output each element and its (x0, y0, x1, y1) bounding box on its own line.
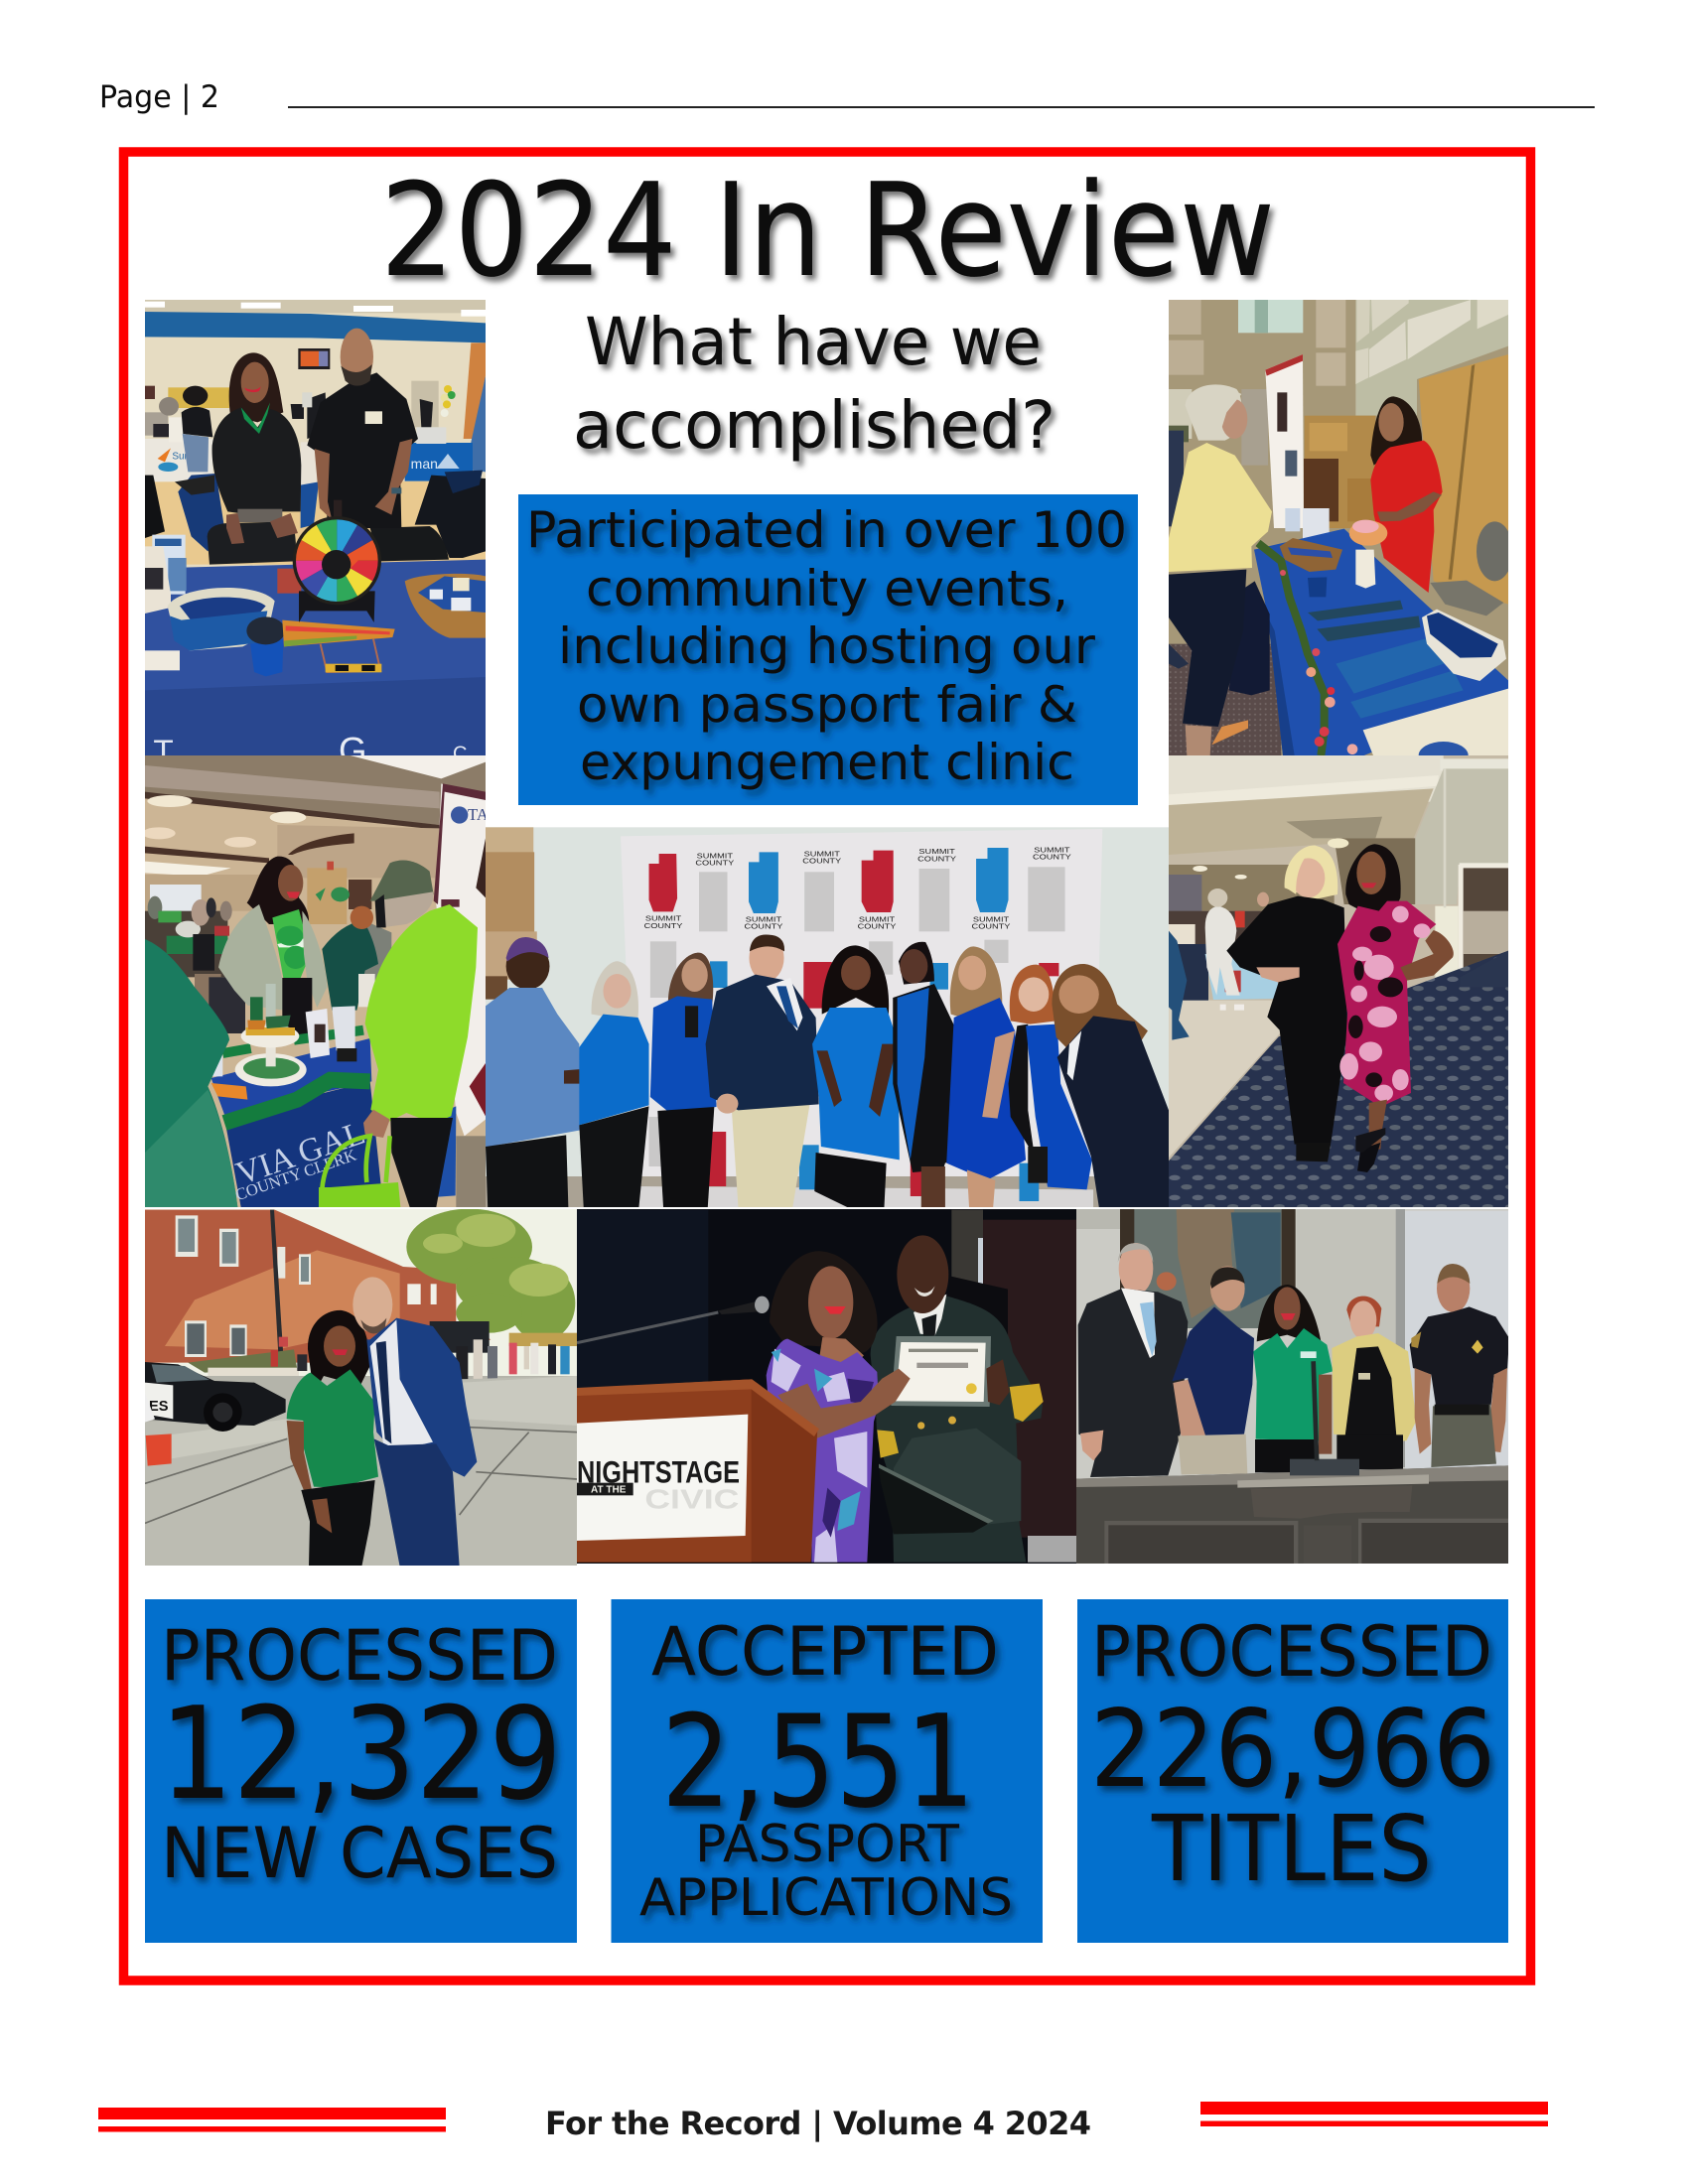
callout: community events: community events, (586, 560, 1068, 617)
photo: Summit County group: COUNTY (695, 860, 735, 867)
photo: Summit County group: COUNTY (745, 923, 783, 930)
photo: Summit County group: COUNTY (972, 923, 1011, 930)
photo: Summit County group: SUMMIT (973, 915, 1009, 923)
footer rule left (98, 2108, 446, 2132)
woman (247, 857, 309, 924)
photo: two women on carpet (1169, 755, 1508, 1207)
woman (229, 352, 283, 422)
person 2 (579, 961, 649, 1207)
certificate (891, 1336, 991, 1407)
crowd (456, 1346, 468, 1379)
photo: Summit County group: COUNTY (802, 858, 842, 865)
swat truck (430, 1321, 490, 1353)
sheriff (1437, 1265, 1470, 1312)
table (145, 560, 486, 755)
stat box: new cases: PROCESSED (161, 1615, 558, 1697)
chair (1477, 521, 1513, 581)
photo: booth with prize wheel: man (411, 456, 438, 472)
footer rule right (1200, 2102, 1548, 2126)
photo: Summit County group: COUNTY (917, 855, 957, 863)
man (307, 372, 418, 528)
folder (879, 1464, 993, 1534)
lanyards (282, 620, 395, 646)
callout: community events: expungement clinic (580, 734, 1074, 791)
person 9 (1052, 964, 1169, 1207)
person 8 (1009, 965, 1092, 1189)
photo: Summit County group (486, 827, 1169, 1207)
page number: Page | 2 (99, 79, 219, 115)
stat box: titles: 226,966 (1090, 1688, 1495, 1812)
photo: St. Patrick's event table: VIA GAL (231, 1115, 369, 1192)
photo: Summit County group: SUMMIT (1034, 846, 1070, 854)
cup (250, 639, 283, 676)
footer text: For the Record | Volume 4 2024 (545, 2105, 1091, 2143)
man polo (1210, 1266, 1245, 1311)
woman yellow (1346, 1297, 1381, 1326)
bg person (1205, 906, 1240, 996)
callout: community events: including hosting our (558, 617, 1095, 675)
lady in yellow (1169, 644, 1189, 669)
blond woman (1285, 846, 1337, 899)
stat box: titles (1077, 1599, 1508, 1943)
red page frame (123, 152, 1531, 1980)
items (1280, 538, 1342, 572)
title: 2024 In Review (380, 155, 1275, 306)
person 6 (893, 942, 961, 1207)
stat box: titles: PROCESSED (1091, 1611, 1492, 1693)
man suit (1119, 1243, 1153, 1295)
wicker basket (405, 574, 486, 638)
dark green man (322, 920, 378, 1011)
callout: community events (518, 494, 1138, 805)
callout: community events: own passport fair & (577, 676, 1077, 734)
photo: podium award presentation: CIVIC (644, 1483, 739, 1514)
stat box: passport applications (612, 1599, 1043, 1943)
wheel base (277, 569, 301, 594)
person 3 (650, 953, 717, 1207)
table (211, 1038, 371, 1115)
backdrop maps (649, 848, 1065, 1201)
tables/crowd (145, 911, 227, 977)
stat box: titles: TITLES (1151, 1796, 1432, 1902)
bucket (146, 1433, 172, 1466)
stat box: new cases: 12,329 (160, 1681, 562, 1829)
mic (577, 1312, 718, 1343)
carpet (1169, 644, 1281, 755)
corvette (145, 1362, 286, 1426)
photo: St. Patrick's event table (145, 755, 498, 1207)
stat box: passport applications: APPLICATIONS (639, 1868, 1013, 1928)
woman (770, 1251, 878, 1353)
stat box: passport applications: ACCEPTED (651, 1613, 999, 1692)
green figure (145, 939, 237, 1207)
stat box: new cases (145, 1599, 577, 1943)
photo: Summit County group: SUMMIT (859, 915, 895, 923)
woman (308, 1310, 370, 1394)
bushes (188, 1349, 297, 1373)
table banner (1205, 951, 1278, 1000)
man (352, 1277, 392, 1332)
person 5 (812, 945, 900, 1207)
photo: street fair with corvette: ES (149, 1399, 169, 1415)
panel: what have we accomplished (573, 304, 1055, 464)
desk (1076, 1465, 1509, 1565)
photo: clerk and visitor at table (1169, 300, 1508, 755)
stat box: passport applications: PASSPORT (695, 1815, 959, 1874)
photo: booth with prize wheel: T (153, 735, 174, 771)
photo: Summit County group: SUMMIT (746, 915, 781, 923)
tree (469, 1297, 474, 1329)
carpet (1169, 951, 1508, 1207)
photo: street fair with corvette (145, 1209, 577, 1566)
photo: booth with prize wheel: Sum (172, 452, 193, 463)
crowd (1169, 911, 1268, 944)
photo: Summit County group: SUMMIT (645, 915, 681, 922)
photo: podium award presentation (577, 1209, 1076, 1564)
stat box: passport applications: 2,551 (661, 1689, 975, 1837)
photo: podium award presentation: AT THE (591, 1485, 627, 1496)
photo: booth with prize wheel: C (453, 743, 467, 764)
white basket (168, 588, 275, 650)
pavement (145, 1376, 577, 1567)
photo: booth with prize wheel (145, 300, 486, 771)
wheel (293, 516, 381, 605)
heading line 1: What have we (585, 304, 1042, 380)
person 4 (706, 935, 819, 1207)
photo: St. Patrick's event table: TAV (468, 805, 498, 824)
photo: courthouse officials (1076, 1209, 1508, 1564)
brick building (145, 1210, 491, 1363)
tray (235, 1053, 307, 1086)
photo: Summit County group: SUMMIT (918, 848, 955, 856)
photo: booth with prize wheel: G (339, 731, 367, 771)
lime bag (319, 1182, 400, 1207)
callout: community events: Participated in over 100 (526, 501, 1127, 559)
floor (1169, 1001, 1281, 1158)
stat box: new cases: NEW CASES (161, 1813, 558, 1894)
flyers (306, 1009, 330, 1058)
photo: Summit County group: COUNTY (858, 923, 897, 930)
photo: Summit County group: SUMMIT (804, 850, 840, 858)
heading line 2: accomplished? (573, 387, 1055, 464)
man (871, 1296, 1043, 1563)
person 7 (946, 946, 1026, 1207)
header rule (288, 106, 1595, 108)
woman green (1257, 1285, 1322, 1346)
table (1254, 529, 1508, 755)
banner (1265, 354, 1304, 528)
lime hoodie man (370, 861, 434, 901)
red dress woman (1370, 396, 1422, 466)
photo: Summit County group: SUMMIT (697, 852, 733, 860)
floral woman (1345, 844, 1401, 922)
person 1 (486, 937, 586, 1207)
chairs (208, 521, 296, 565)
photo: Summit County group: COUNTY (1033, 854, 1071, 861)
photo: Summit County group: COUNTY (644, 922, 683, 930)
banner (436, 783, 486, 1136)
photo: St. Patrick's event table: COUNTY CLERK (232, 1146, 358, 1204)
photo: podium award presentation: NIGHTSTAGE (577, 1454, 740, 1490)
podium (577, 1379, 817, 1563)
